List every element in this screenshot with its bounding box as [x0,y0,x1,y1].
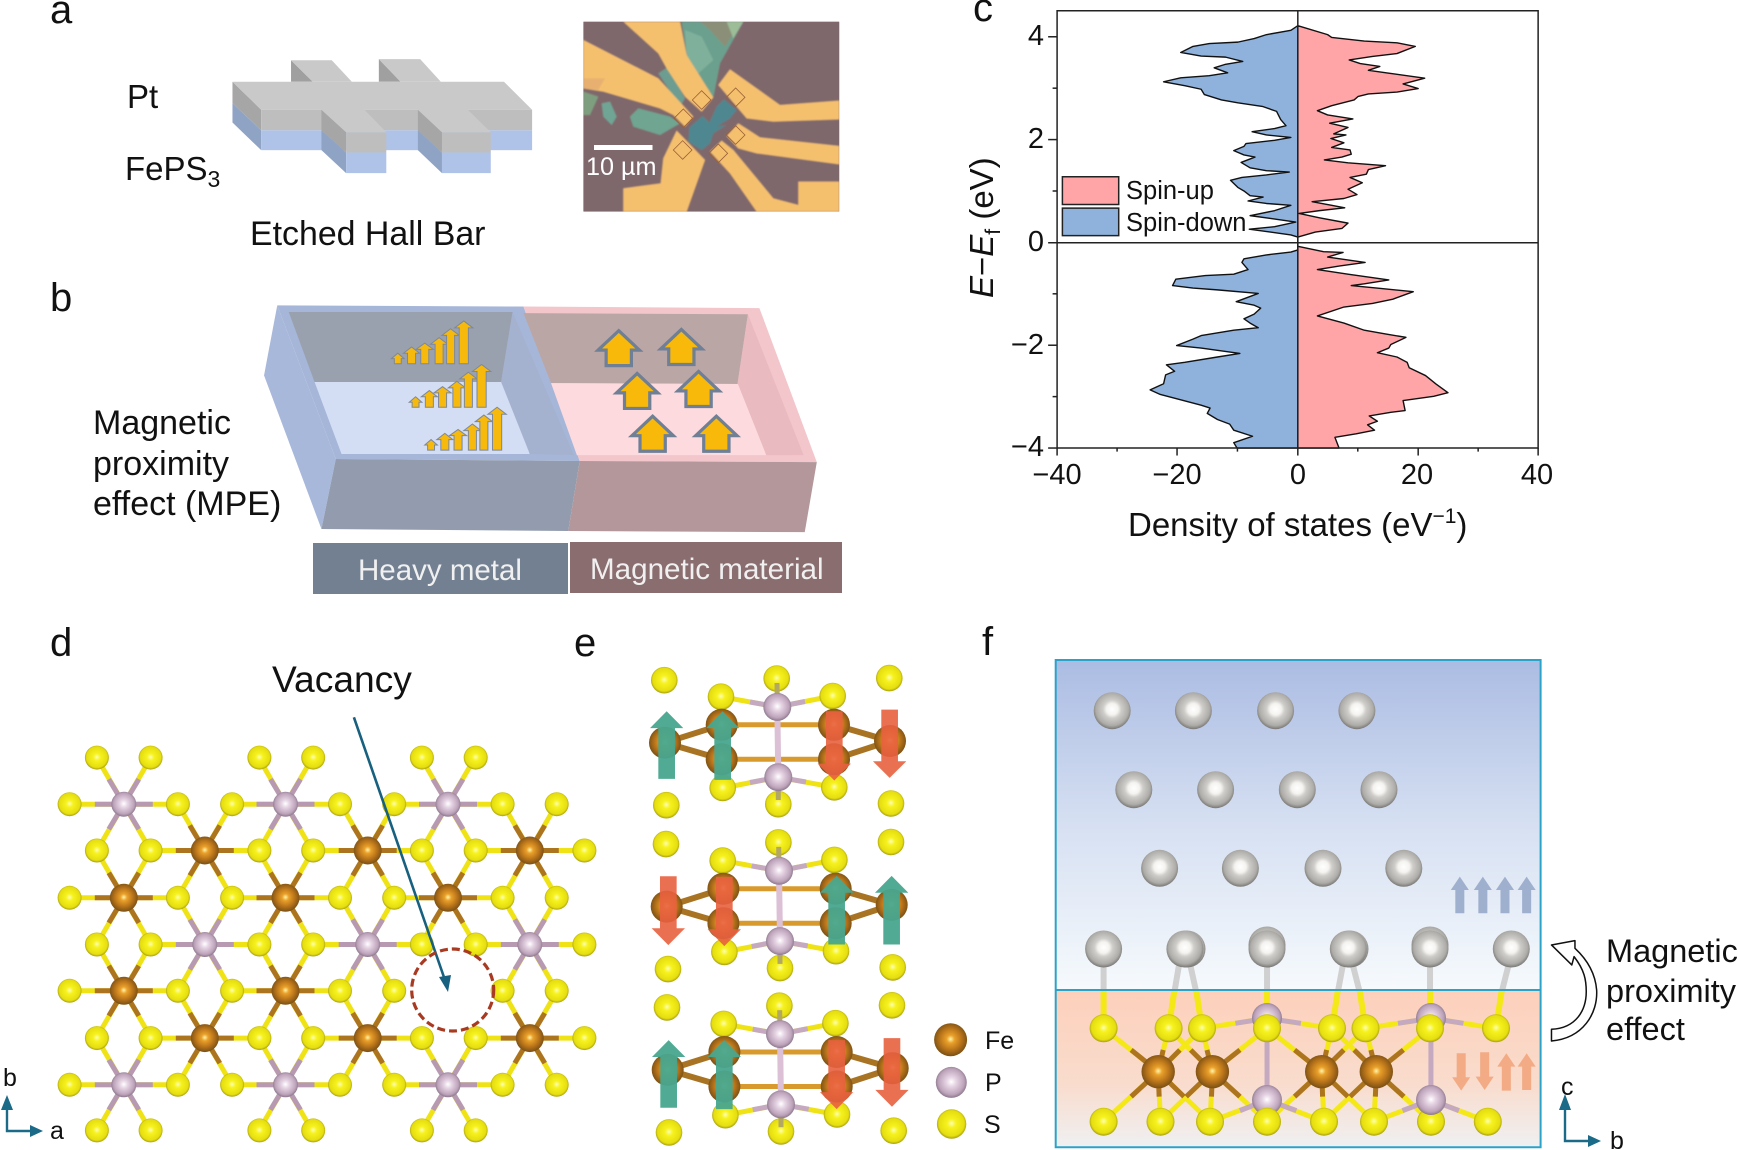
Fe atoms [110,836,544,1052]
legend labels: Spin-up [1126,177,1214,205]
y tick labels: 4 [1028,20,1044,52]
proximity effect label: Magnetic [1606,933,1738,969]
magnetic material label box: Magnetic material [590,553,824,586]
x tick labels: 40 [1521,459,1553,491]
vacancy label: Vacancy [272,658,412,700]
Pt-S and lattice bonds [1104,963,1509,1122]
legend labels: Spin-down [1126,209,1246,237]
Pt region background [1056,660,1541,990]
x tick labels: 20 [1401,459,1433,491]
legend labels [1126,177,1246,237]
Pt atoms [1085,692,1530,968]
FePS3 region background [1056,990,1541,1147]
y tick labels: 0 [1028,226,1044,258]
legend swatches [1062,177,1119,236]
optical micrograph of device [583,22,839,212]
axes frame and ticks [1048,11,1538,456]
spin arrows in Pt [1451,877,1536,913]
layer label FePS3: FePS [125,150,208,187]
MPE label: proximity [93,445,229,483]
front P atom [1416,1085,1446,1115]
a-b axis indicator: a [50,1117,64,1145]
etched Hall bar device schematic [232,59,532,173]
atom legend: S [984,1111,1001,1139]
atom legend [934,1023,1014,1139]
panel a [50,0,839,253]
P atoms [111,792,542,1097]
x tick labels [1032,459,1553,491]
y tick labels: −2 [1011,329,1044,361]
heavy metal / magnetic material box schematic [264,305,817,532]
vacancy dashed circle [412,949,494,1031]
panel f frame and interface line [1056,660,1541,1147]
heavy metal label box [313,543,568,594]
x axis title: Density of states (eV [1128,506,1432,543]
spin-up curve [1298,26,1448,448]
MPE label: effect (MPE) [93,485,281,523]
y axis title: (eV) [963,157,1000,229]
spin arrows [650,710,909,1109]
heavy metal label box: Heavy metal [358,554,522,587]
x tick labels: 0 [1290,459,1306,491]
y tick labels [1011,20,1044,463]
proximity effect label: proximity [1606,973,1737,1009]
spin-down curve [1150,26,1298,448]
staircase arrows: induced moments in heavy metal [391,321,506,450]
panel f [982,620,1738,1150]
y axis title: f [982,229,1005,235]
interface structure [1085,692,1530,1136]
crystal lattice top view [58,746,596,1142]
b-c axis indicator: c [1561,1073,1574,1101]
y tick labels: −4 [1011,431,1044,463]
proximity effect label: effect [1606,1011,1685,1047]
atom legend: Fe [985,1027,1014,1055]
MPE label: Magnetic [93,404,231,442]
atom legend: P [985,1069,1002,1097]
device caption: Etched Hall Bar [250,215,485,253]
panel b [50,276,842,594]
x axis title: ) [1456,506,1467,543]
vacancy pointer arrow [354,717,451,992]
scale bar [594,145,652,150]
y tick labels: 2 [1028,123,1044,155]
a-b axis indicator [1,1064,64,1145]
scale label: 10 µm [586,153,657,181]
panel label e: e [574,621,596,665]
layer label FePS3: 3 [208,166,220,192]
a-b axis indicator: b [3,1064,17,1092]
x tick labels: −20 [1152,459,1202,491]
panel c [963,0,1553,543]
x tick labels: −40 [1032,459,1082,491]
magnetic moment arrows [598,329,737,451]
FePS3 layer 2 [651,829,908,982]
x axis title: −1 [1432,505,1456,528]
Fe atoms [1142,1055,1393,1088]
panel label b: b [50,276,72,320]
panel label d: d [50,621,72,665]
y axis title: E−E [963,235,1000,298]
FePS3 layer 1 [649,665,906,818]
P bonds [70,758,584,1131]
magnetic material label box [570,542,842,593]
S atoms [58,746,596,1142]
panel label f: f [982,620,994,664]
S atoms [1090,1014,1510,1136]
P atoms [1252,1003,1446,1115]
curved proximity arrow [1551,941,1597,1041]
density of states chart [1048,11,1538,456]
FePS3 layer 3 [652,992,909,1146]
spin arrows in FePS3 [1452,1052,1536,1091]
panel d [1,621,596,1145]
layer label Pt: Pt [127,78,158,115]
b-c axis indicator [1559,1073,1624,1150]
panel e [574,621,1014,1146]
Fe bonds [70,804,584,1085]
